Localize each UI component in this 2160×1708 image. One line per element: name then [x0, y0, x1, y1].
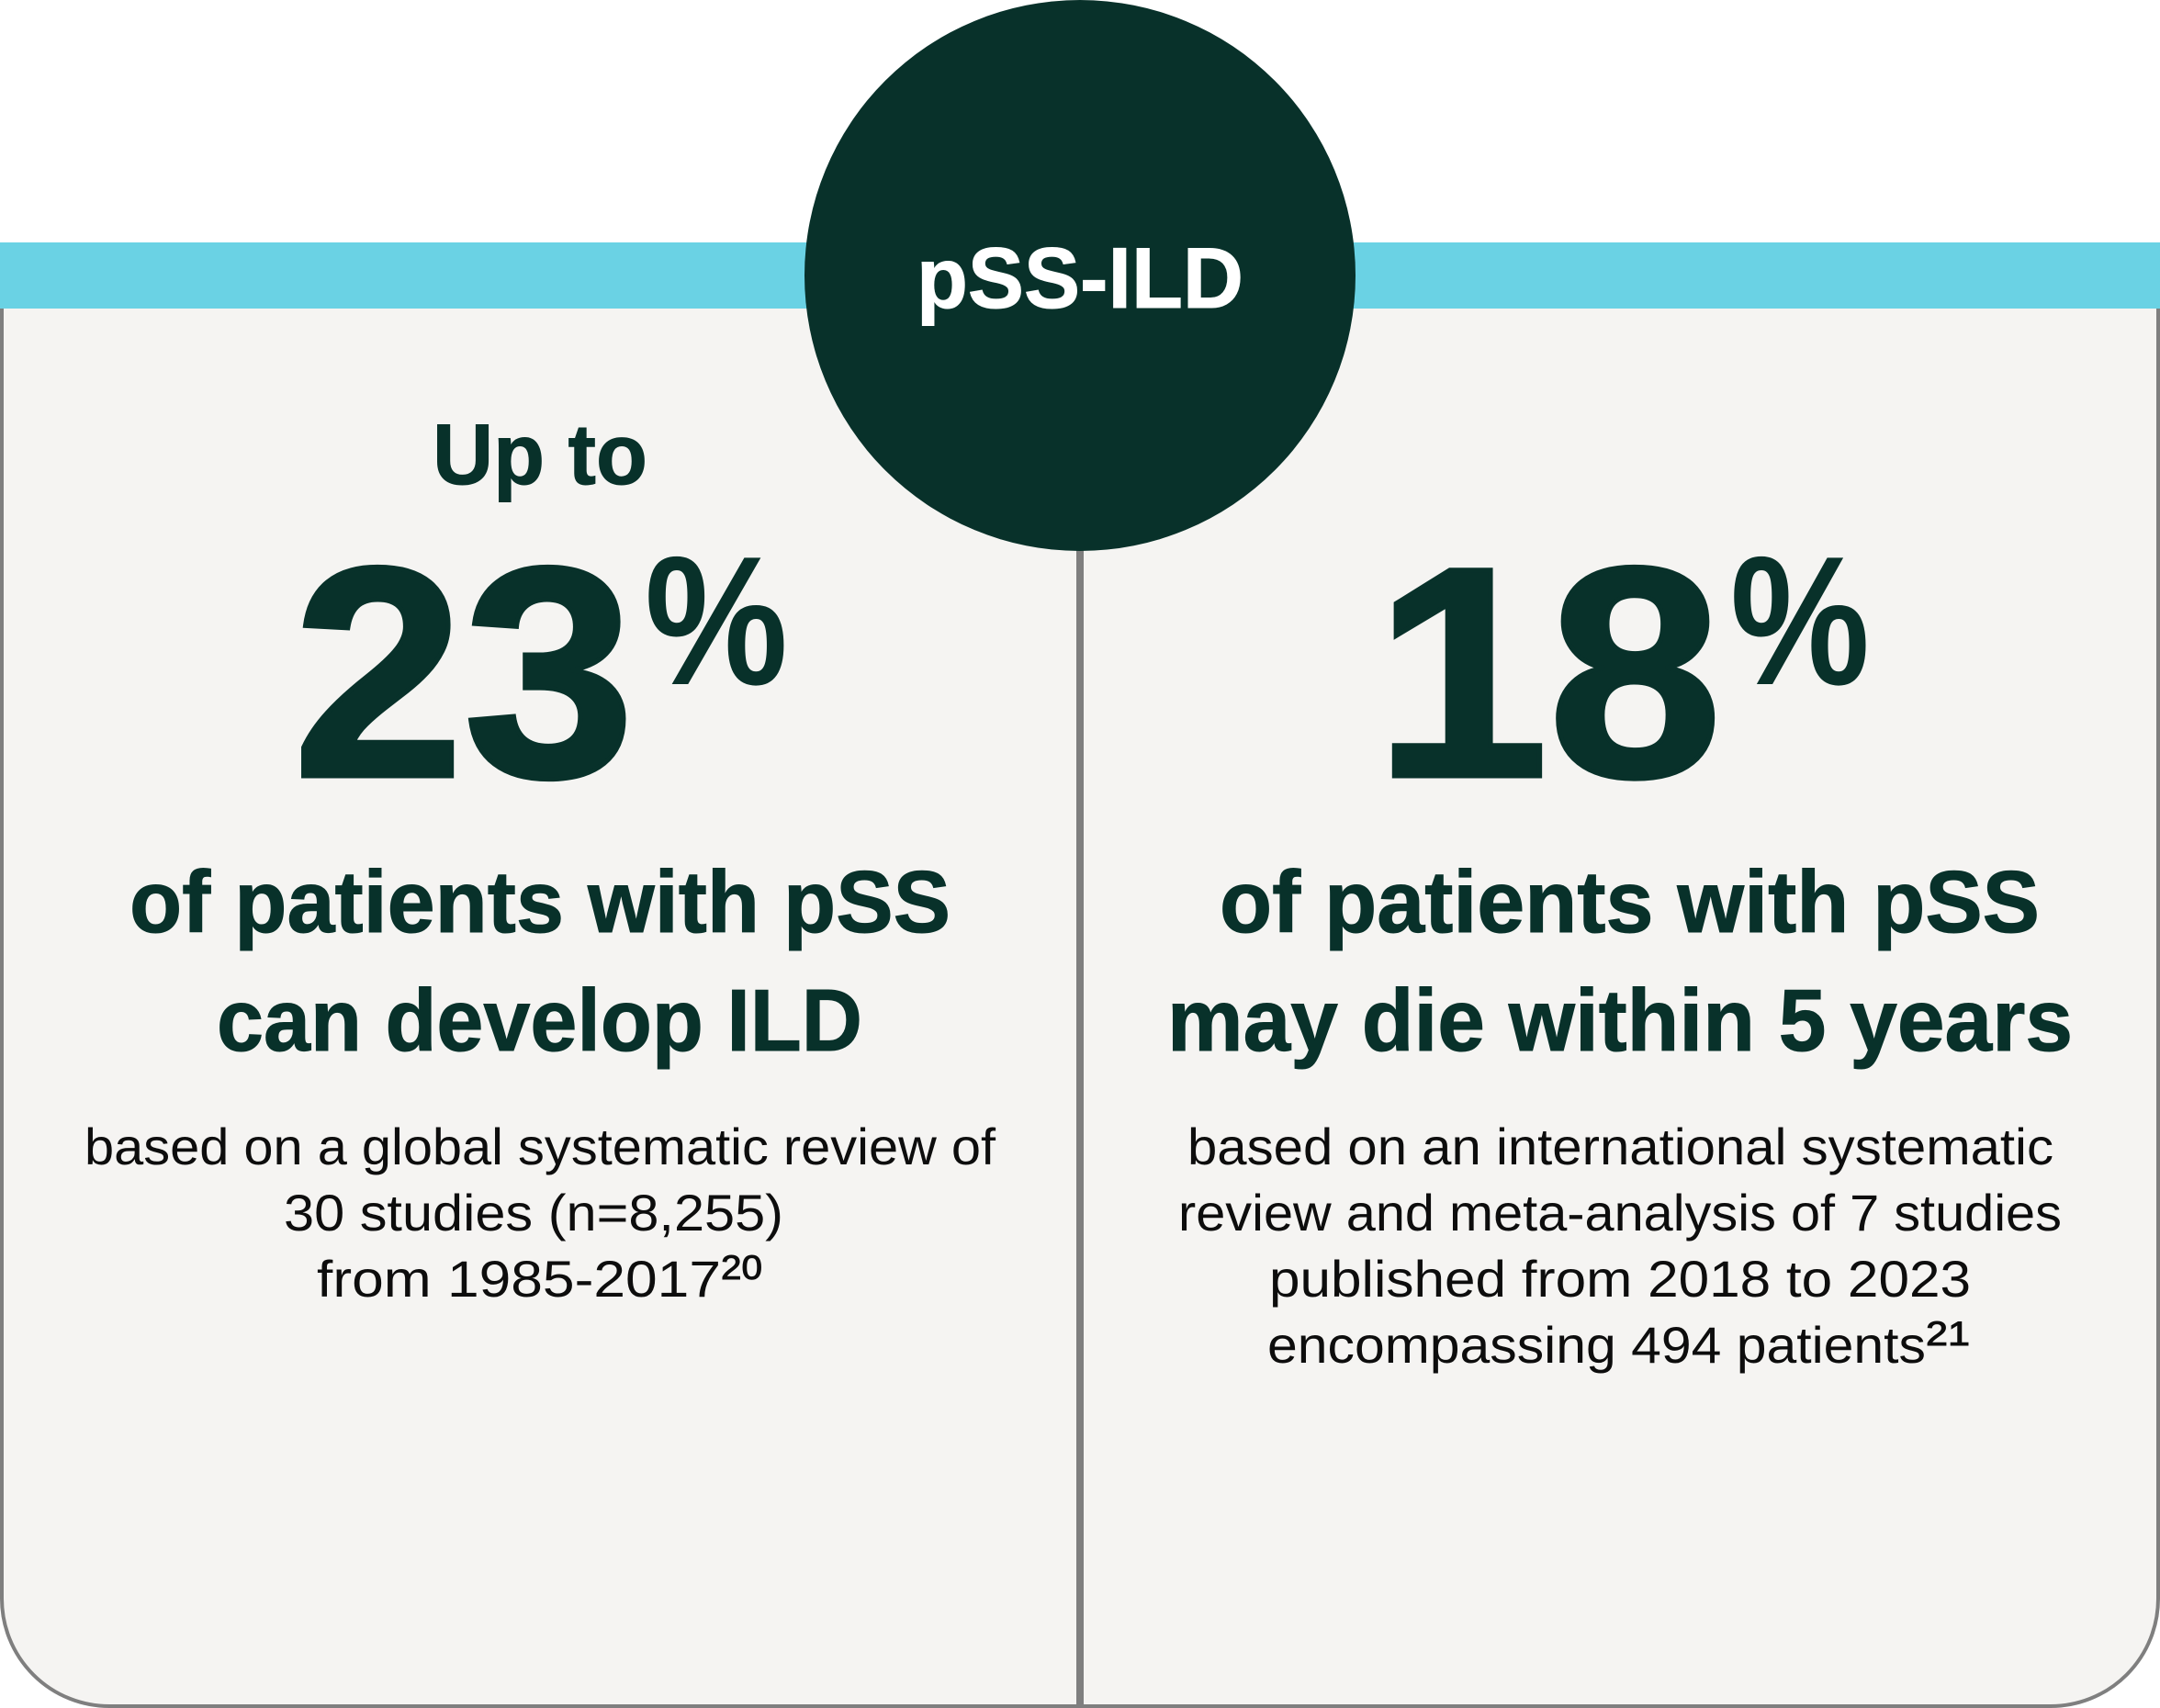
heading: of patients with pSS may die within 5 years: may die within 5 years: [1167, 972, 2073, 1070]
header bar: [0, 242, 2160, 309]
divider between columns: [1076, 542, 1084, 1708]
stat: 23%: %: [645, 519, 788, 724]
body text: right source: review and meta-analysis of 7 studies: [1178, 1184, 2062, 1242]
badge: pSS-ILD circle: [804, 0, 1356, 551]
stat: 18%: [1375, 506, 1870, 840]
body text: left source: 30 studies (n=8,255): [284, 1184, 783, 1242]
body text: right source: [1178, 1118, 2062, 1374]
stat: 23%: [293, 506, 788, 840]
body text: right source: encompassing 494 patients: [1267, 1316, 1926, 1374]
heading: of patients with pSS can develop ILD: of patients with pSS: [129, 853, 951, 951]
body text: left source: from 1985-2017: [317, 1250, 721, 1308]
stat: 23%: 23: [293, 506, 635, 840]
stat: 18%: 18: [1375, 506, 1722, 840]
panel: right statistic: [1167, 506, 2073, 1374]
badge: pSS-ILD circle: pSS-ILD: [917, 230, 1243, 326]
body text: left source: based on a global systematic review of: [84, 1118, 996, 1175]
heading: of patients with pSS may die within 5 years: [1167, 853, 2073, 1070]
body text: right source: based on an international systematic: [1187, 1118, 2053, 1175]
heading: of patients with pSS may die within 5 years: of patients with pSS: [1220, 853, 2040, 951]
body text: right source: 21: [1926, 1315, 1970, 1353]
stat: 18%: %: [1730, 519, 1870, 724]
panel: left statistic: [84, 406, 996, 1308]
body text: left source: 20: [721, 1249, 762, 1287]
body text: right source: published from 2018 to 2023: [1269, 1250, 1971, 1308]
heading: of patients with pSS can develop ILD: can develop ILD: [217, 972, 862, 1070]
body text: left source: [84, 1118, 996, 1308]
heading: of patients with pSS can develop ILD: [129, 853, 951, 1070]
label: Up to: Up to: [433, 406, 647, 502]
